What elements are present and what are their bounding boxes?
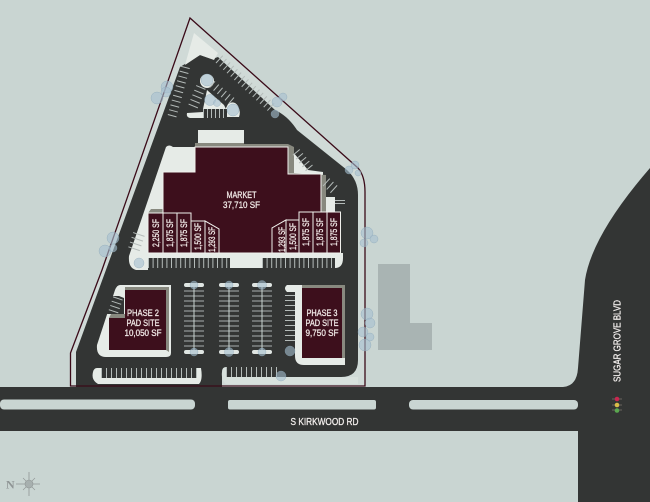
market anchor building: 37,710 SF	[223, 200, 260, 211]
pale landscaped areas	[93, 33, 358, 384]
unit labels: 1,293 SF	[207, 227, 218, 252]
curb islands	[93, 368, 202, 384]
lot ground	[70, 18, 365, 386]
road label: S Kirkwood Rd: S KIRKWOOD RD	[290, 417, 358, 428]
market anchor building	[163, 147, 321, 253]
phase 3 pad site: PAD SITE	[306, 318, 338, 329]
phase 2 pad site: PHASE 2	[127, 308, 159, 319]
phase 2 pad site: 10,050 SF	[124, 328, 162, 339]
trees	[99, 74, 378, 381]
phase 3 pad site	[302, 288, 342, 358]
market anchor building: MARKET	[226, 190, 257, 201]
icon: north compass: N	[6, 478, 15, 492]
left tenant units	[148, 213, 219, 253]
unit labels: 1,875 SF	[179, 219, 190, 247]
pavement	[76, 55, 358, 387]
phase 2 pad site: PAD SITE	[126, 318, 160, 329]
phase 2 pad site	[109, 290, 166, 350]
phase 3 pad site: PHASE 3	[306, 308, 338, 319]
property boundary line	[70, 18, 365, 386]
unit labels: 1,500 SF	[288, 223, 299, 250]
phase 3 pad ground	[285, 285, 345, 365]
road label: Sugar Grove Blvd: SUGAR GROVE BLVD	[612, 300, 624, 382]
parking stalls	[101, 59, 340, 373]
icon: traffic light	[612, 397, 622, 413]
unit labels: 1,875 SF	[301, 218, 312, 246]
road network	[0, 168, 650, 502]
unit labels	[151, 218, 340, 252]
unit labels: 2,250 SF	[151, 219, 162, 247]
property site	[70, 18, 365, 387]
icon: north compass	[6, 472, 40, 496]
phase 2 pad ground	[97, 285, 171, 357]
centre parking rows	[184, 283, 272, 354]
unit labels: 1,875 SF	[165, 219, 176, 247]
neighbouring building	[378, 264, 432, 350]
phase 3 pad site: 9,750 SF	[306, 328, 339, 339]
unit labels: 1,875 SF	[329, 218, 340, 246]
unit labels: 1,875 SF	[315, 218, 326, 246]
unit labels: 1,293 SF	[277, 227, 288, 252]
stall backing patches	[107, 109, 227, 314]
right tenant units	[272, 212, 340, 253]
building shadows	[109, 143, 345, 358]
unit labels: 1,500 SF	[193, 223, 204, 250]
